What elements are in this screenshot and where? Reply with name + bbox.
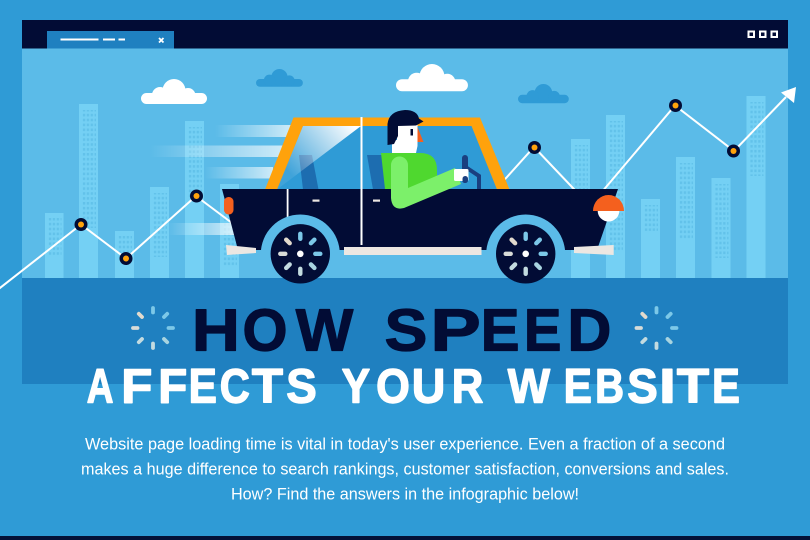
title line 2: E <box>712 360 740 413</box>
title line 2: I <box>659 360 676 413</box>
title line 2: S <box>627 360 658 413</box>
title line 2: C <box>220 360 250 413</box>
car body <box>222 189 618 250</box>
arm <box>391 156 461 209</box>
driver <box>381 110 468 209</box>
title line 2: W <box>508 360 551 413</box>
front wheel <box>496 224 555 284</box>
bumpers and sill <box>226 245 614 255</box>
intro paragraph: How? Find the answers in the infographic below! <box>231 484 579 504</box>
speed lines <box>150 125 291 235</box>
window sky <box>22 48 788 278</box>
front seat <box>367 155 386 190</box>
title line 2: F <box>158 360 187 413</box>
torso <box>381 153 437 189</box>
title line 2: T <box>252 360 283 413</box>
title line 2: O <box>376 360 410 413</box>
title line 1: W <box>296 297 354 363</box>
roof frame <box>265 118 510 190</box>
window glass <box>277 126 497 190</box>
icon: blue cloud right <box>518 84 569 103</box>
title line 2: R <box>452 360 483 413</box>
window control buttons <box>748 32 777 37</box>
title line 1: E <box>524 297 562 363</box>
nose <box>418 127 424 142</box>
steering wheel <box>462 155 479 190</box>
intro paragraph: Website page loading time is vital in today's user experience. Even a fraction of a second <box>85 434 725 454</box>
browser tab <box>47 31 174 48</box>
title line 2: T <box>677 360 709 413</box>
intro paragraph <box>81 434 729 504</box>
hair <box>388 110 424 145</box>
title line 2: Y <box>342 360 370 413</box>
tail light <box>224 197 234 214</box>
window floor band <box>22 278 788 384</box>
title line 2: B <box>595 360 624 413</box>
title line 2: F <box>121 360 152 413</box>
headlight <box>593 195 624 222</box>
hand <box>454 169 468 181</box>
bottom dark band <box>0 536 810 540</box>
car <box>222 110 624 294</box>
rear window shine <box>277 126 361 190</box>
title line 2: S <box>286 360 317 413</box>
title line 2: E <box>189 360 217 413</box>
clouds <box>141 64 569 104</box>
growth line chart <box>0 87 796 290</box>
icon: loading spinner left <box>133 308 173 348</box>
door lines <box>287 117 362 245</box>
title line 1: S <box>384 297 427 363</box>
data points <box>74 99 740 265</box>
title line 1: P <box>430 297 481 363</box>
neck and face <box>392 122 418 153</box>
door handles <box>312 200 380 202</box>
rear wheel <box>271 224 330 284</box>
icon: loading spinner right <box>636 308 676 348</box>
arrowhead <box>781 87 796 103</box>
browser window <box>22 20 788 384</box>
window title bar <box>22 20 788 48</box>
rear seat <box>299 155 318 190</box>
eye <box>410 129 413 136</box>
title line 2: E <box>564 360 592 413</box>
title line 1: E <box>481 297 520 363</box>
title line 2: A <box>87 360 113 413</box>
icon: white cloud right <box>396 64 468 91</box>
title line 1: D <box>567 297 611 363</box>
title line 1: H <box>192 297 240 363</box>
icon: white cloud left <box>141 79 207 104</box>
title line 1: O <box>242 297 287 363</box>
icon: blue cloud left <box>256 69 303 87</box>
city skyline buildings <box>45 96 766 278</box>
wheel arches <box>261 214 565 250</box>
intro paragraph: makes a huge difference to search rankings, customer satisfaction, conversions and sales. <box>81 460 729 478</box>
title line 2: U <box>412 360 445 413</box>
